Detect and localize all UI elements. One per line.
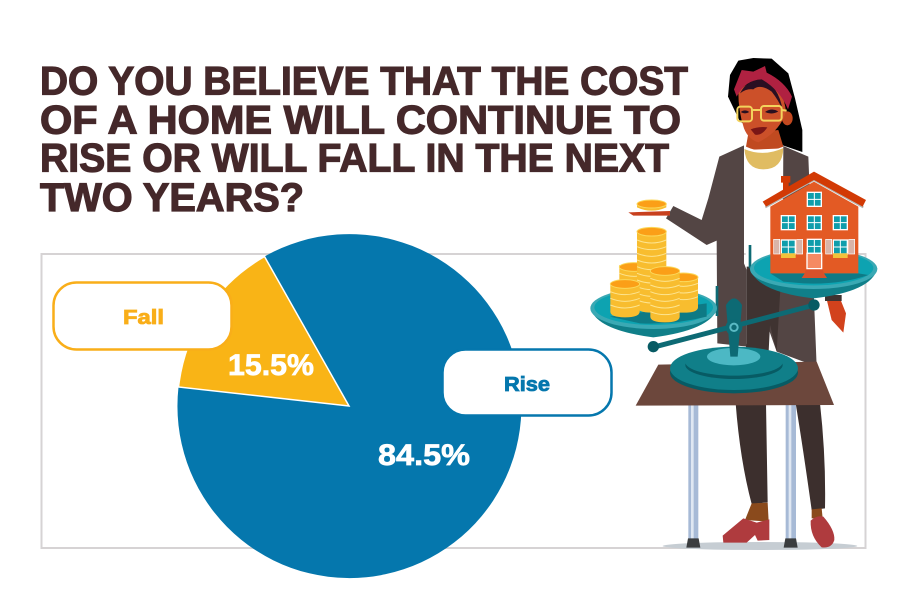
value: 84.5%: 84.5% xyxy=(378,439,470,472)
face xyxy=(738,81,786,142)
pants upper xyxy=(736,267,782,403)
right pan xyxy=(750,268,877,298)
title: DO YOU BELIEVE THAT THE COST xyxy=(40,60,688,104)
right hand xyxy=(827,298,846,333)
title: TWO YEARS? xyxy=(40,176,304,220)
house xyxy=(763,172,866,278)
callout: Fall: Fall xyxy=(123,307,164,329)
chart frame xyxy=(42,254,866,548)
pivot xyxy=(726,319,742,336)
left pan hanger xyxy=(716,286,718,316)
scale base xyxy=(670,352,798,393)
right pan hanger xyxy=(749,245,751,268)
shirt xyxy=(744,148,787,270)
collar xyxy=(744,148,783,169)
callout: Rise xyxy=(442,350,612,416)
coin stack front right xyxy=(650,267,680,322)
coin stack back right xyxy=(669,273,698,313)
hair xyxy=(728,58,802,152)
value: 15.5%: 15.5% xyxy=(228,349,314,382)
eyes xyxy=(741,109,778,114)
coins stacks xyxy=(610,200,698,322)
house walls xyxy=(770,182,858,273)
left hand xyxy=(628,211,670,216)
windows xyxy=(781,192,847,254)
table top xyxy=(636,362,834,406)
headband xyxy=(734,66,792,109)
glasses xyxy=(737,106,787,121)
coin on hand xyxy=(637,204,666,211)
coin stack back tall xyxy=(637,227,666,313)
beam xyxy=(653,303,815,349)
post xyxy=(726,298,742,357)
jacket xyxy=(666,145,817,367)
table xyxy=(636,362,834,548)
balance scale xyxy=(590,245,877,393)
feet xyxy=(745,503,823,522)
left pan xyxy=(591,308,717,337)
roof gray edge xyxy=(765,180,863,207)
mouth xyxy=(751,127,767,135)
woman xyxy=(628,58,846,548)
pie chart xyxy=(177,234,521,578)
pie slice: fall 15.5% xyxy=(178,256,349,406)
title xyxy=(40,60,688,220)
floor shadow xyxy=(663,542,857,550)
coin stack front left xyxy=(610,280,640,317)
cuff xyxy=(825,295,842,301)
illustration: woman with scale xyxy=(590,58,877,550)
right shoe xyxy=(811,516,834,548)
steps xyxy=(802,269,827,278)
table legs xyxy=(688,405,698,539)
left shoe xyxy=(723,518,769,543)
callout: Fall xyxy=(54,282,232,350)
roof xyxy=(763,172,866,207)
ear xyxy=(782,111,793,125)
door xyxy=(807,253,822,269)
chimney xyxy=(781,176,790,190)
flower boxes xyxy=(781,253,796,258)
coin stack back left xyxy=(619,263,649,307)
neck xyxy=(746,130,783,151)
beam ends xyxy=(648,341,659,352)
title: RISE OR WILL FALL IN THE NEXT xyxy=(40,136,669,180)
shutters xyxy=(774,239,855,254)
pie slice: rise 84.5% xyxy=(177,234,521,578)
title: OF A HOME WILL CONTINUE TO xyxy=(40,98,681,142)
callout: Rise: Rise xyxy=(504,374,550,396)
table feet xyxy=(686,538,798,548)
legs xyxy=(736,403,825,510)
hair fringe xyxy=(740,79,783,110)
